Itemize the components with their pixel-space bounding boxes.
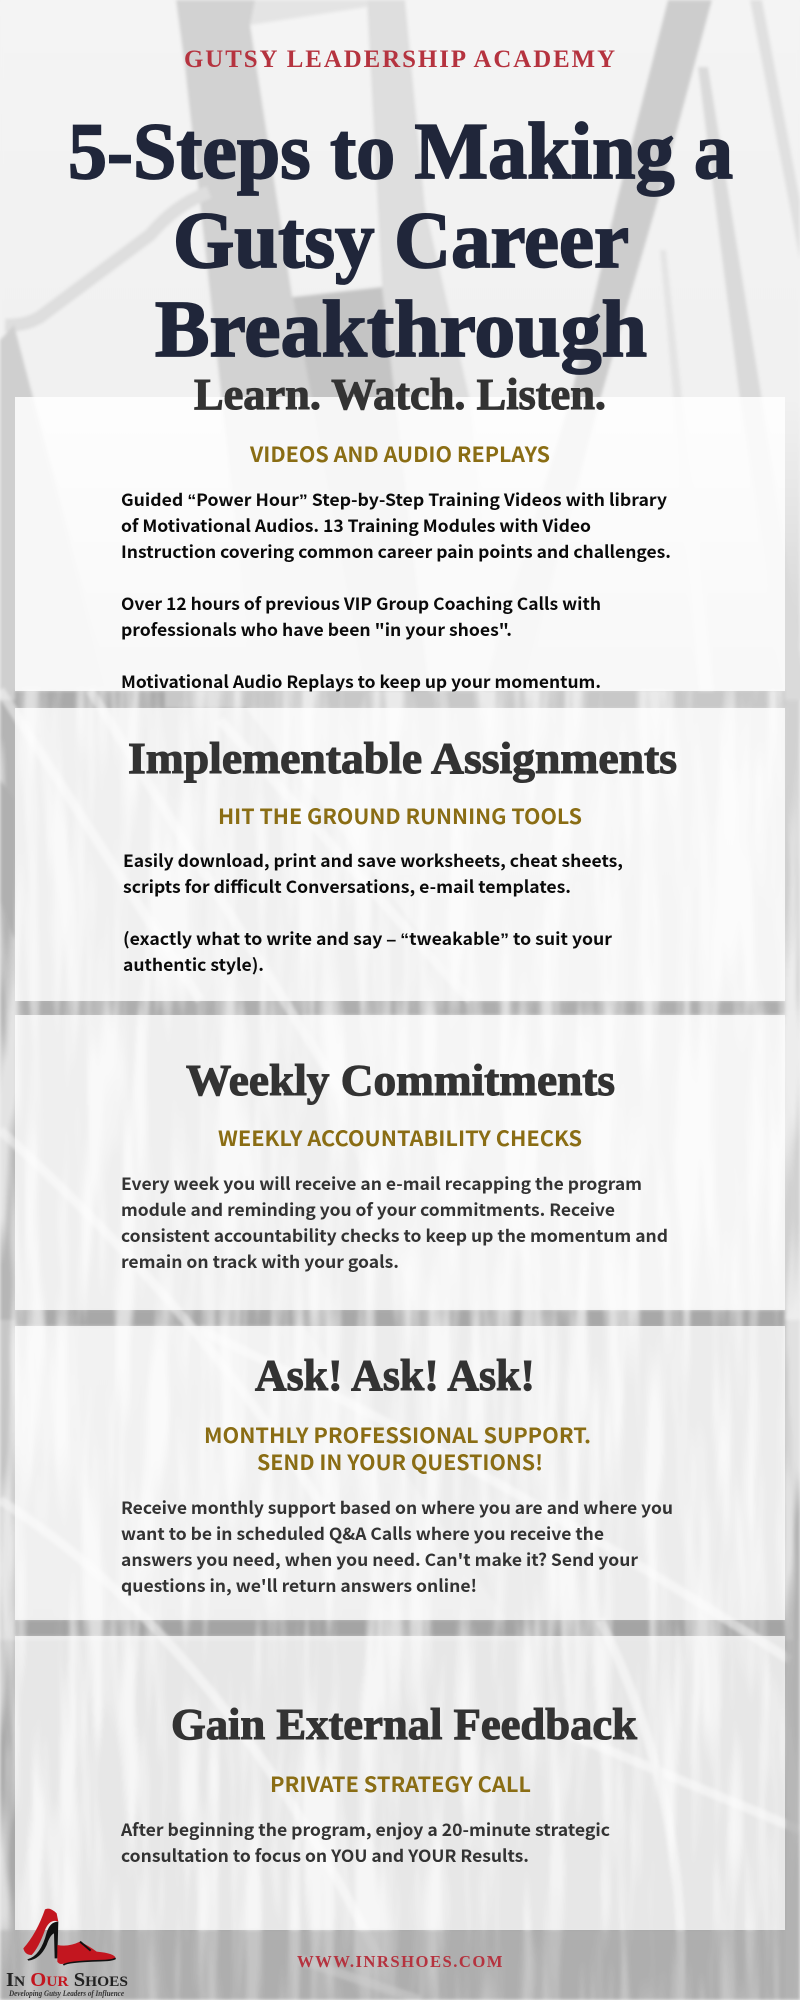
body text: Motivational Audio Replays to keep up your momentum. xyxy=(121,668,601,693)
subheading: MONTHLY PROFESSIONAL SUPPORT. xyxy=(204,1420,591,1450)
main title xyxy=(68,106,733,374)
logo tagline: Developing Gutsy Leaders of Influence xyxy=(8,1989,124,1998)
body text: After beginning the program, enjoy a 20-minute strategic xyxy=(120,1816,610,1841)
panel: gain external feedback xyxy=(15,1636,785,1930)
panel: learn watch listen xyxy=(15,370,785,693)
footer url: WWW.INRSHOES.COM xyxy=(297,1952,504,1971)
body text: consistent accountability checks to keep up the momentum and xyxy=(121,1222,668,1247)
body text: professionals who have been "in your shoes". xyxy=(121,616,512,641)
body text xyxy=(121,486,671,693)
body text: Every week you will receive an e-mail recapping the program xyxy=(121,1170,642,1195)
body text: questions in, we'll return answers online! xyxy=(121,1572,477,1597)
logo wordmark: IN OUR SHOES xyxy=(6,1969,128,1991)
body text: module and reminding you of your commitments. Receive xyxy=(121,1196,615,1221)
panel: implementable assignments xyxy=(15,708,785,1001)
subheading: VIDEOS AND AUDIO REPLAYS xyxy=(249,439,550,469)
body text: authentic style). xyxy=(123,951,264,976)
body text: of Motivational Audios. 13 Training Modules with Video xyxy=(121,512,591,537)
subheading: PRIVATE STRATEGY CALL xyxy=(270,1769,531,1799)
subheading: WEEKLY ACCOUNTABILITY CHECKS xyxy=(218,1123,582,1153)
panel: weekly commitments xyxy=(15,1015,785,1310)
body text: Instruction covering common career pain points and challenges. xyxy=(121,538,671,563)
heading: Weekly Commitments xyxy=(186,1056,615,1105)
heading: Implementable Assignments xyxy=(128,734,677,783)
body text: consultation to focus on YOU and YOUR Results. xyxy=(121,1842,529,1867)
body text xyxy=(121,1494,673,1597)
heading: Gain External Feedback xyxy=(171,1700,638,1749)
body text: answers you need, when you need. Can't make it? Send your xyxy=(121,1546,639,1571)
heading: Ask! Ask! Ask! xyxy=(255,1351,535,1400)
heading: Learn. Watch. Listen. xyxy=(194,370,606,419)
body text: (exactly what to write and say – “tweakable” to suit your xyxy=(123,925,613,950)
body text: scripts for difficult Conversations, e-mail templates. xyxy=(123,873,571,898)
body text xyxy=(123,847,623,976)
main title: Breakthrough xyxy=(155,284,647,374)
main title: 5-Steps to Making a xyxy=(68,106,733,196)
subheading: SEND IN YOUR QUESTIONS! xyxy=(257,1447,543,1477)
subheading: HIT THE GROUND RUNNING TOOLS xyxy=(218,801,582,831)
body text xyxy=(121,1170,668,1273)
panel: ask ask ask xyxy=(15,1326,785,1620)
logo: In Our Shoes xyxy=(6,1909,128,1998)
body text: Receive monthly support based on where you are and where you xyxy=(121,1494,673,1519)
main title: Gutsy Career xyxy=(173,195,629,285)
body text: Over 12 hours of previous VIP Group Coaching Calls with xyxy=(121,590,601,615)
body text xyxy=(120,1816,610,1867)
body text: Guided “Power Hour” Step-by-Step Training Videos with library xyxy=(121,486,667,511)
subheading xyxy=(204,1420,591,1477)
kicker: academy name: GUTSY LEADERSHIP ACADEMY xyxy=(184,46,617,73)
darker shelf masses that tint the panels xyxy=(0,700,480,1010)
body text: remain on track with your goals. xyxy=(121,1248,399,1273)
body text: Easily download, print and save worksheets, cheat sheets, xyxy=(123,847,623,872)
icon: shoes xyxy=(23,1909,116,1965)
body text: want to be in scheduled Q&A Calls where you receive the xyxy=(121,1520,604,1545)
